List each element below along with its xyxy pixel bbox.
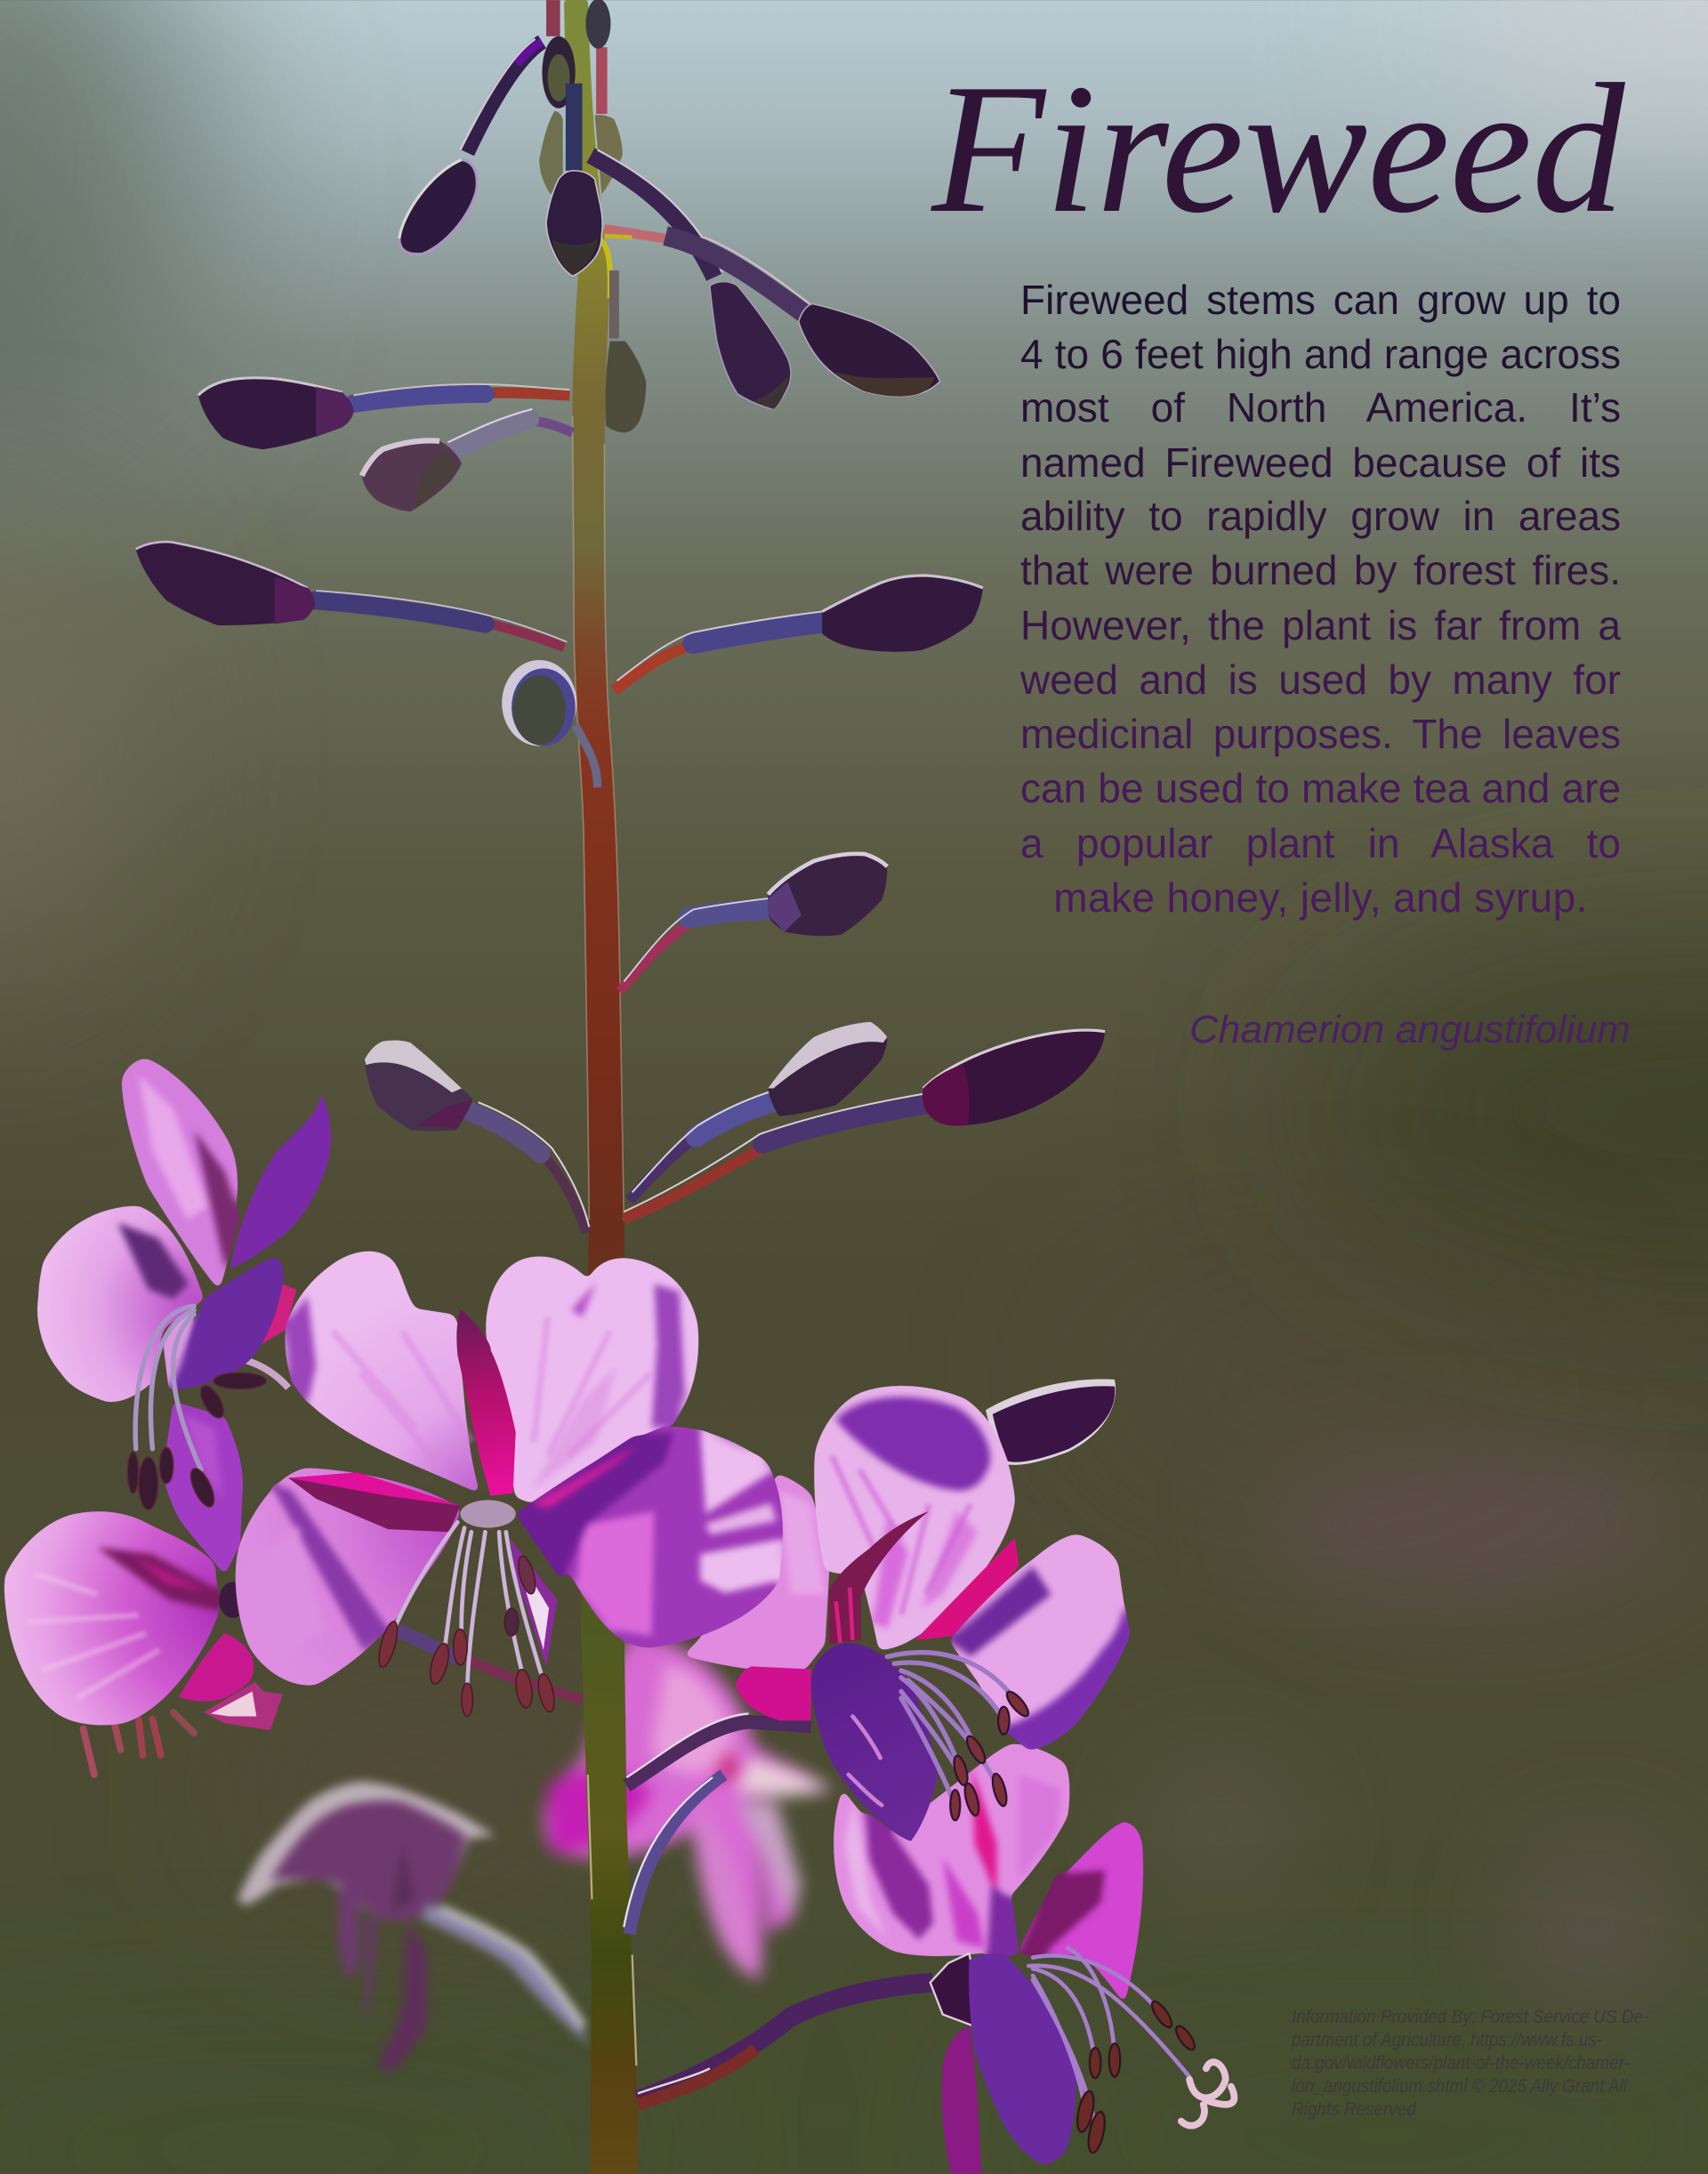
flower: upper left — [37, 1059, 331, 1575]
stigma curl — [1181, 2062, 1234, 2126]
body text: can be used to make tea and are — [1020, 765, 1621, 811]
body text: most of North America. It’s — [1020, 384, 1621, 431]
bud: lower right long — [624, 1030, 1105, 1219]
bud: right lower — [591, 149, 791, 409]
petals — [834, 1744, 1069, 1958]
blurred background flower, lower left — [237, 1782, 591, 2073]
stamens — [887, 1653, 1018, 1805]
tube petal — [164, 1402, 243, 1575]
bud: lower left pale — [365, 1041, 589, 1233]
body text: a popular plant in Alaska to — [1020, 820, 1621, 866]
bud: lower right short — [630, 1022, 887, 1201]
bud: small olive — [605, 270, 646, 432]
credit text: da.gov/wildflowers/plant-of-the-week/chamer- — [1292, 2053, 1630, 2073]
bud: right long — [614, 576, 983, 690]
body text: medicinal purposes. The leaves — [1020, 711, 1621, 757]
right petal — [1019, 1822, 1143, 2003]
anthers — [375, 1554, 557, 1717]
anthers — [127, 1373, 266, 1510]
left petal — [37, 1206, 204, 1402]
magenta stripe — [915, 1537, 1019, 1640]
blurred background flower, centre — [544, 1636, 832, 1980]
big petal — [4, 1511, 219, 1725]
lower left pedicel — [422, 1904, 591, 2046]
calyx — [931, 1953, 987, 2031]
anthers — [1075, 1999, 1198, 2154]
credit text: ion_angustifolium.shtml © 2025 Ally Grant All — [1292, 2076, 1627, 2097]
body text: ability to rapidly grow in areas — [1020, 493, 1621, 539]
body text: named Fireweed because of its — [1020, 439, 1621, 486]
body text: that were burned by forest fires. — [1020, 547, 1621, 593]
lower right small sepal — [511, 1539, 557, 1666]
top petal — [122, 1059, 240, 1290]
credit text: Rights Reserved — [1292, 2099, 1416, 2120]
petal veins — [28, 1574, 159, 1698]
upper buds and pedicels — [136, 0, 1105, 1233]
stamens — [391, 1522, 544, 1691]
body text — [1020, 277, 1621, 921]
body text: However, the plant is far from a — [1020, 602, 1621, 648]
bud: left small — [362, 409, 573, 511]
body text: make honey, jelly, and syrup. — [1053, 874, 1588, 921]
top tips — [539, 0, 623, 194]
flower: lower left — [4, 1511, 283, 1775]
upper left petal — [286, 1252, 479, 1494]
small lower petals — [179, 1633, 283, 1730]
lower sepal — [942, 2025, 981, 2174]
left magenta sepal — [288, 1472, 460, 1532]
bud behind right flower — [986, 1379, 1116, 1465]
body text: 4 to 6 feet high and range across — [1020, 331, 1621, 377]
upper right petal — [487, 1257, 698, 1503]
lower left petal — [236, 1469, 460, 1685]
bud: hanging left — [399, 39, 542, 254]
bud: left long — [136, 542, 567, 648]
bud: small dark olive — [542, 36, 576, 109]
cup petal — [164, 1256, 284, 1390]
pistil base — [460, 1500, 516, 1528]
purple lower petal — [969, 1953, 1076, 2163]
body text: weed and is used by many for — [1020, 656, 1621, 703]
bud: right upper — [604, 229, 940, 397]
bud: left large — [198, 378, 570, 449]
title: Fireweed — [930, 46, 1625, 252]
body text: Fireweed stems can grow up to — [1020, 277, 1621, 323]
right sepal — [230, 1095, 331, 1268]
bud: round — [502, 660, 598, 787]
petal veins — [333, 1317, 651, 1469]
left petal — [683, 1474, 829, 1671]
hanging anthers — [84, 1712, 194, 1775]
flower centre — [219, 1582, 246, 1618]
dark hood petal — [811, 1643, 938, 1841]
curved sepal — [829, 1511, 929, 1644]
stem — [564, 0, 638, 2174]
bud: mid right — [620, 854, 887, 991]
flower: large centre — [236, 1252, 783, 1717]
right petal — [950, 1534, 1130, 1750]
flower: right — [683, 1386, 1130, 1841]
pedicels of the open flowers — [398, 1630, 933, 2105]
stamens — [135, 1306, 201, 1469]
anthers — [950, 1688, 1032, 1820]
bud: centre hanging — [546, 84, 602, 276]
credit text: Information Provided By: Forest Service US De- — [1292, 2007, 1648, 2027]
centre magenta sepal — [456, 1308, 516, 1496]
lower right petal — [516, 1427, 783, 1647]
flower: lower right — [834, 1744, 1234, 2174]
magenta small sepal — [737, 1666, 811, 1720]
credit text — [1292, 2007, 1648, 2120]
magenta sepal — [261, 1284, 297, 1345]
petal veins — [832, 1456, 971, 1615]
species name: Chamerion angustifolium — [1189, 1009, 1631, 1051]
top petal — [815, 1386, 1015, 1650]
stamens — [1028, 1948, 1189, 2132]
credit text: partment of Agriculture, https://www.fs.us- — [1292, 2030, 1602, 2050]
pale stalk — [246, 1360, 288, 1388]
